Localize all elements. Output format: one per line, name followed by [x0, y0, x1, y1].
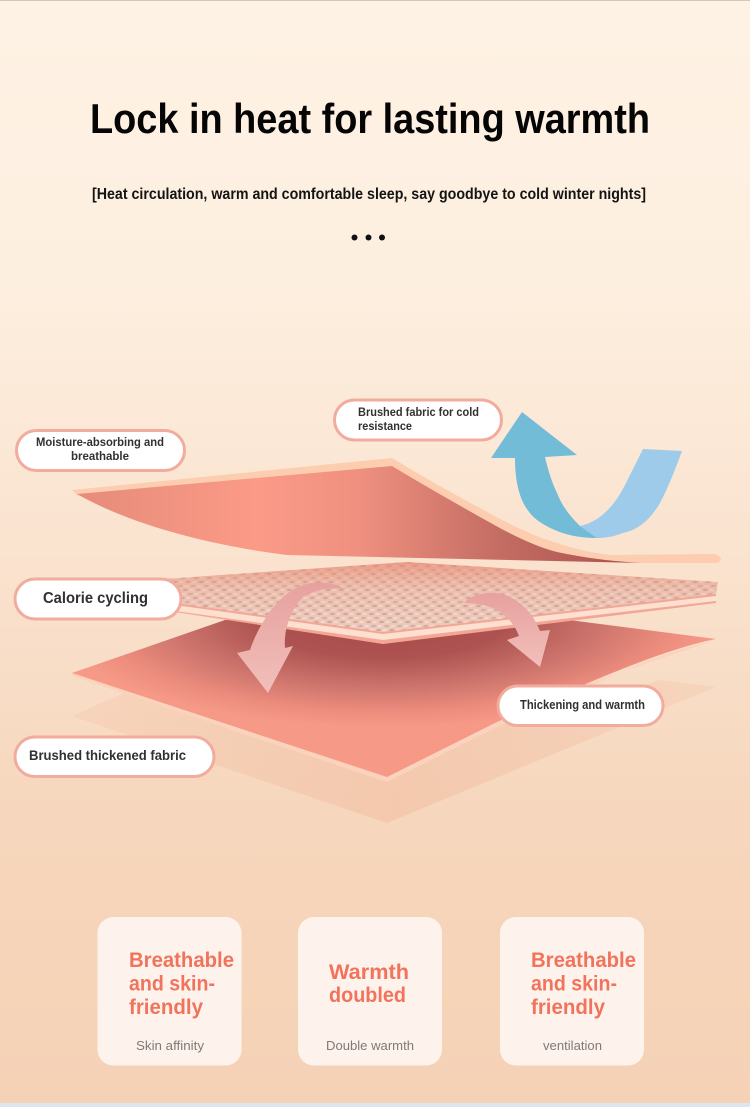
middle layer: knit heat-cycling fabric: [165, 562, 718, 644]
card: breathable and skin-friendly, skin affinity: Breathable: [129, 949, 234, 972]
label: thickening and warmth: [498, 686, 663, 726]
icon: pink downward arrow right: [464, 593, 550, 667]
three dots: [352, 234, 385, 240]
top layer: moisture-absorbing sheet: [72, 458, 721, 563]
label: thickening and warmth: Thickening and warmth: [520, 698, 645, 712]
card: warmth doubled, double warmth: Warmth: [329, 961, 409, 984]
card: breathable and skin-friendly, skin affinity: friendly: [129, 996, 203, 1019]
bottom layer: brushed thickened fabric: [72, 620, 716, 782]
card: breathable and skin-friendly, ventilation: [500, 917, 644, 1066]
title: Lock in heat for lasting warmth: [90, 95, 650, 142]
label: brushed fabric for cold resistance: Brushed fabric for cold: [358, 405, 479, 419]
label: calorie cycling: Calorie cycling: [43, 590, 148, 607]
card: warmth doubled, double warmth: doubled: [329, 984, 406, 1007]
card: breathable and skin-friendly, ventilation: and skin-: [531, 972, 617, 996]
label: brushed thickened fabric: Brushed thickened fabric: [29, 747, 186, 763]
card: breathable and skin-friendly, ventilation: ventilation: [543, 1038, 602, 1053]
card: warmth doubled, double warmth: Double warmth: [326, 1038, 414, 1053]
label: moisture-absorbing and breathable: breathable: [71, 449, 129, 463]
bottom sheet shadow: [72, 680, 716, 823]
layered fabric diagram: [72, 412, 721, 823]
card: breathable and skin-friendly, ventilation: friendly: [531, 996, 605, 1019]
card: warmth doubled, double warmth: [298, 917, 442, 1066]
label: calorie cycling: [15, 579, 181, 619]
card: breathable and skin-friendly, skin affinity: [98, 917, 242, 1066]
label: moisture-absorbing and breathable: [16, 430, 184, 470]
label: moisture-absorbing and breathable: Moisture-absorbing and: [36, 435, 164, 449]
card: breathable and skin-friendly, ventilation: Breathable: [531, 949, 636, 972]
label: brushed fabric for cold resistance: [334, 400, 502, 440]
label: brushed fabric for cold resistance: resistance: [358, 419, 412, 433]
subtitle: [Heat circulation, warm and comfortable sleep, say goodbye to cold winter nights]: [92, 186, 646, 203]
icon: blue rising arrow: [491, 412, 682, 538]
icon: pink downward arrow left: [237, 582, 345, 693]
card: breathable and skin-friendly, skin affinity: and skin-: [129, 972, 215, 996]
card: breathable and skin-friendly, skin affinity: Skin affinity: [136, 1038, 205, 1053]
label: brushed thickened fabric: [15, 737, 214, 776]
